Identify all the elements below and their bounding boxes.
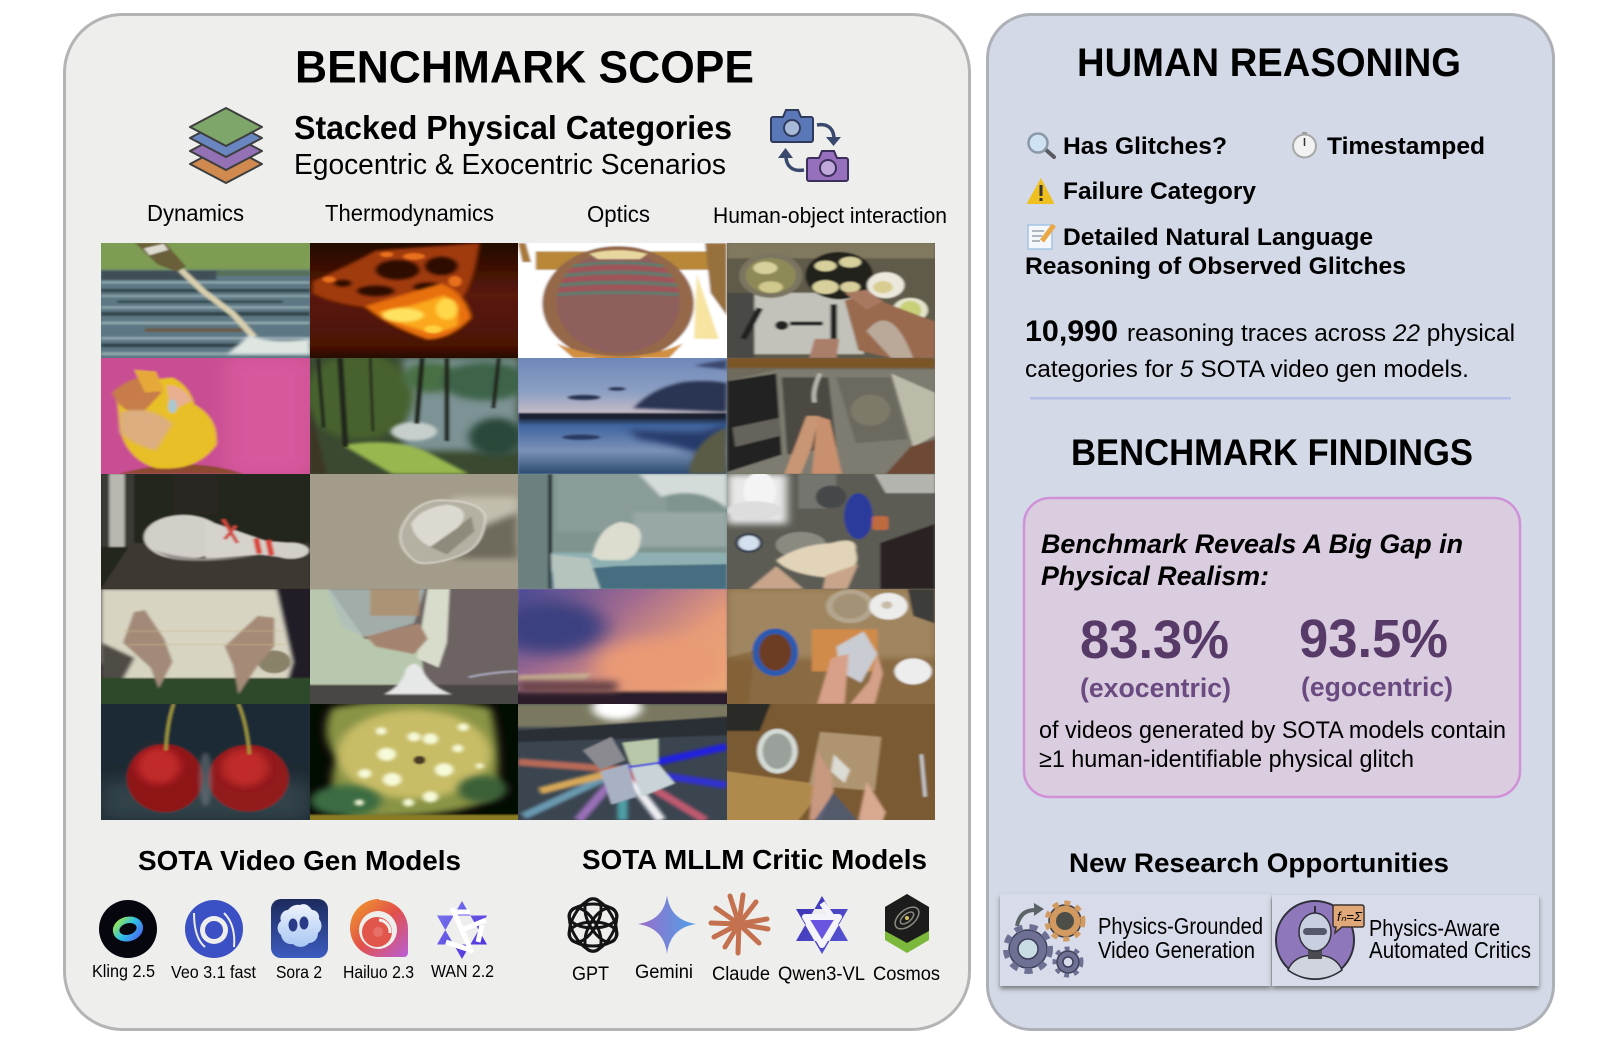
subtitle: stacked physical categories: Stacked Physical Categories xyxy=(294,109,732,146)
critic model: claude xyxy=(711,895,770,985)
photo: polar bear behind glass xyxy=(518,474,727,589)
video model: hailuo 2.3: Hailuo 2.3 xyxy=(343,962,414,982)
photo: kneading dough in kitchen xyxy=(727,474,935,589)
heading: sota mllm critic models: SOTA MLLM Critic Models xyxy=(582,844,927,875)
stat: 10,990 reasoning traces: categories for 5 SOTA video gen models. xyxy=(1025,356,1469,383)
subtitle: egocentric and exocentric scenarios: Egocentric & Exocentric Scenarios xyxy=(294,149,726,181)
video model: wan 2.2 xyxy=(431,901,494,981)
callout body text xyxy=(1039,717,1506,773)
stat: 10,990 reasoning traces xyxy=(1025,315,1515,383)
panel: human reasoning and findings xyxy=(988,14,1554,1030)
photo: yellow goo on magenta xyxy=(101,358,310,474)
heading: human reasoning: HUMAN REASONING xyxy=(1077,41,1461,85)
photo: washing hands in sink xyxy=(727,358,935,474)
label: detailed natural language reasoning: Detailed Natural Language xyxy=(1063,224,1373,251)
video model: veo 3.1 fast: Veo 3.1 fast xyxy=(171,962,256,982)
stat: 83.3 percent exocentric xyxy=(1080,610,1231,703)
callout heading: Physical Realism: xyxy=(1041,561,1269,591)
column label: thermodynamics: Thermodynamics xyxy=(325,200,494,226)
photo: water jet on pavement xyxy=(101,243,310,358)
panel: benchmark scope xyxy=(64,14,970,1030)
video model: kling 2.5 xyxy=(92,900,157,981)
label: timestamped: Timestamped xyxy=(1327,133,1485,160)
photo: lake reflection xyxy=(518,358,727,474)
photo: fire xyxy=(310,243,518,358)
video model: sora 2: Sora 2 xyxy=(276,962,322,982)
icon: gears xyxy=(1006,903,1083,976)
critic model: qwen3-vl xyxy=(778,896,865,985)
video model: sora 2 xyxy=(271,899,328,982)
stat: 93.5 percent egocentric: 93.5% xyxy=(1299,609,1448,669)
video model: hailuo 2.3 xyxy=(343,899,414,982)
critic model: cosmos: Cosmos xyxy=(873,964,940,985)
stat: 93.5 percent egocentric xyxy=(1299,609,1453,702)
column label: optics: Optics xyxy=(587,201,650,227)
title: benchmark scope: BENCHMARK SCOPE xyxy=(295,42,754,92)
stat: 10,990 reasoning traces: 10,990 xyxy=(1025,315,1118,348)
label: has glitches: Has Glitches? xyxy=(1063,133,1227,160)
video model: veo 3.1 fast xyxy=(171,900,256,982)
photo: cherries colliding xyxy=(101,704,310,820)
photo: prisms and light rays xyxy=(518,704,727,820)
label: Physics-Aware xyxy=(1369,915,1500,941)
critic model: claude: Claude xyxy=(712,964,770,985)
label: detailed natural language reasoning: Reasoning of Observed Glitches xyxy=(1025,253,1406,280)
icon: robot with formula bubble: fₙ=Σ xyxy=(1337,909,1363,924)
video model: kling 2.5: Kling 2.5 xyxy=(92,961,155,981)
icon: magnifying glass xyxy=(1028,134,1054,157)
icon: memo xyxy=(1028,225,1054,249)
photo: melting ice xyxy=(310,474,518,589)
callout body text: ≥1 human-identifiable physical glitch xyxy=(1039,746,1414,773)
label xyxy=(1369,915,1531,963)
icon: stopwatch xyxy=(1293,132,1316,158)
photo grid xyxy=(90,235,946,828)
video model: wan 2.2: WAN 2.2 xyxy=(431,961,494,981)
photo: sunset rainbow xyxy=(518,589,727,704)
label: Automated Critics xyxy=(1369,937,1531,963)
critic model: gpt: GPT xyxy=(572,964,609,985)
icon: stacked layers xyxy=(190,108,262,183)
callout heading xyxy=(1041,529,1463,591)
label: failure category: Failure Category xyxy=(1063,178,1257,205)
icon: robot with formula bubble xyxy=(1276,901,1364,979)
heading: new research opportunities: New Research Opportunities xyxy=(1069,848,1449,878)
stat: 83.3 percent exocentric: (exocentric) xyxy=(1080,673,1231,703)
label: Video Generation xyxy=(1098,937,1255,963)
stat: 10,990 reasoning traces: reasoning traces across 22 physical xyxy=(1127,320,1515,347)
stat: 93.5 percent egocentric: (egocentric) xyxy=(1301,672,1453,702)
photo: pouring over salt mound xyxy=(310,589,518,704)
card: physics-grounded video generation xyxy=(1000,894,1271,986)
callout body text: of videos generated by SOTA models contain xyxy=(1039,717,1506,744)
critic model: qwen3-vl: Qwen3-VL xyxy=(778,964,865,985)
photo: fireworks explosion xyxy=(310,704,518,820)
photo: hands gesture xyxy=(101,589,310,704)
label xyxy=(1098,913,1263,963)
callout: big gap in physical realism xyxy=(1024,498,1520,797)
icon: warning xyxy=(1027,178,1054,204)
critic model: gemini: Gemini xyxy=(635,962,693,983)
critic model: gpt xyxy=(563,894,623,985)
photo: chopping on wooden table xyxy=(727,704,935,820)
critic model: gemini xyxy=(635,895,696,983)
label: detailed natural language reasoning xyxy=(1025,224,1406,280)
card: physics-aware automated critics xyxy=(1272,895,1539,986)
label: Physics-Grounded xyxy=(1098,913,1263,939)
stat: 83.3 percent exocentric: 83.3% xyxy=(1080,610,1229,670)
photo: bowling pin in press xyxy=(101,474,310,589)
icon: swapping cameras xyxy=(771,110,848,181)
column label: human-object interaction: Human-object interaction xyxy=(713,203,947,228)
heading: sota video gen models: SOTA Video Gen Models xyxy=(138,845,461,876)
critic model: cosmos xyxy=(873,894,940,985)
photo: wrapping food in foil xyxy=(727,589,935,704)
column label: dynamics: Dynamics xyxy=(147,200,244,226)
heading: benchmark findings: BENCHMARK FINDINGS xyxy=(1071,432,1473,473)
photo: cooking on stove xyxy=(727,243,935,358)
photo: forest smoke xyxy=(310,358,518,474)
callout heading: Benchmark Reveals A Big Gap in xyxy=(1041,529,1463,559)
photo: porthole interference xyxy=(518,243,727,358)
